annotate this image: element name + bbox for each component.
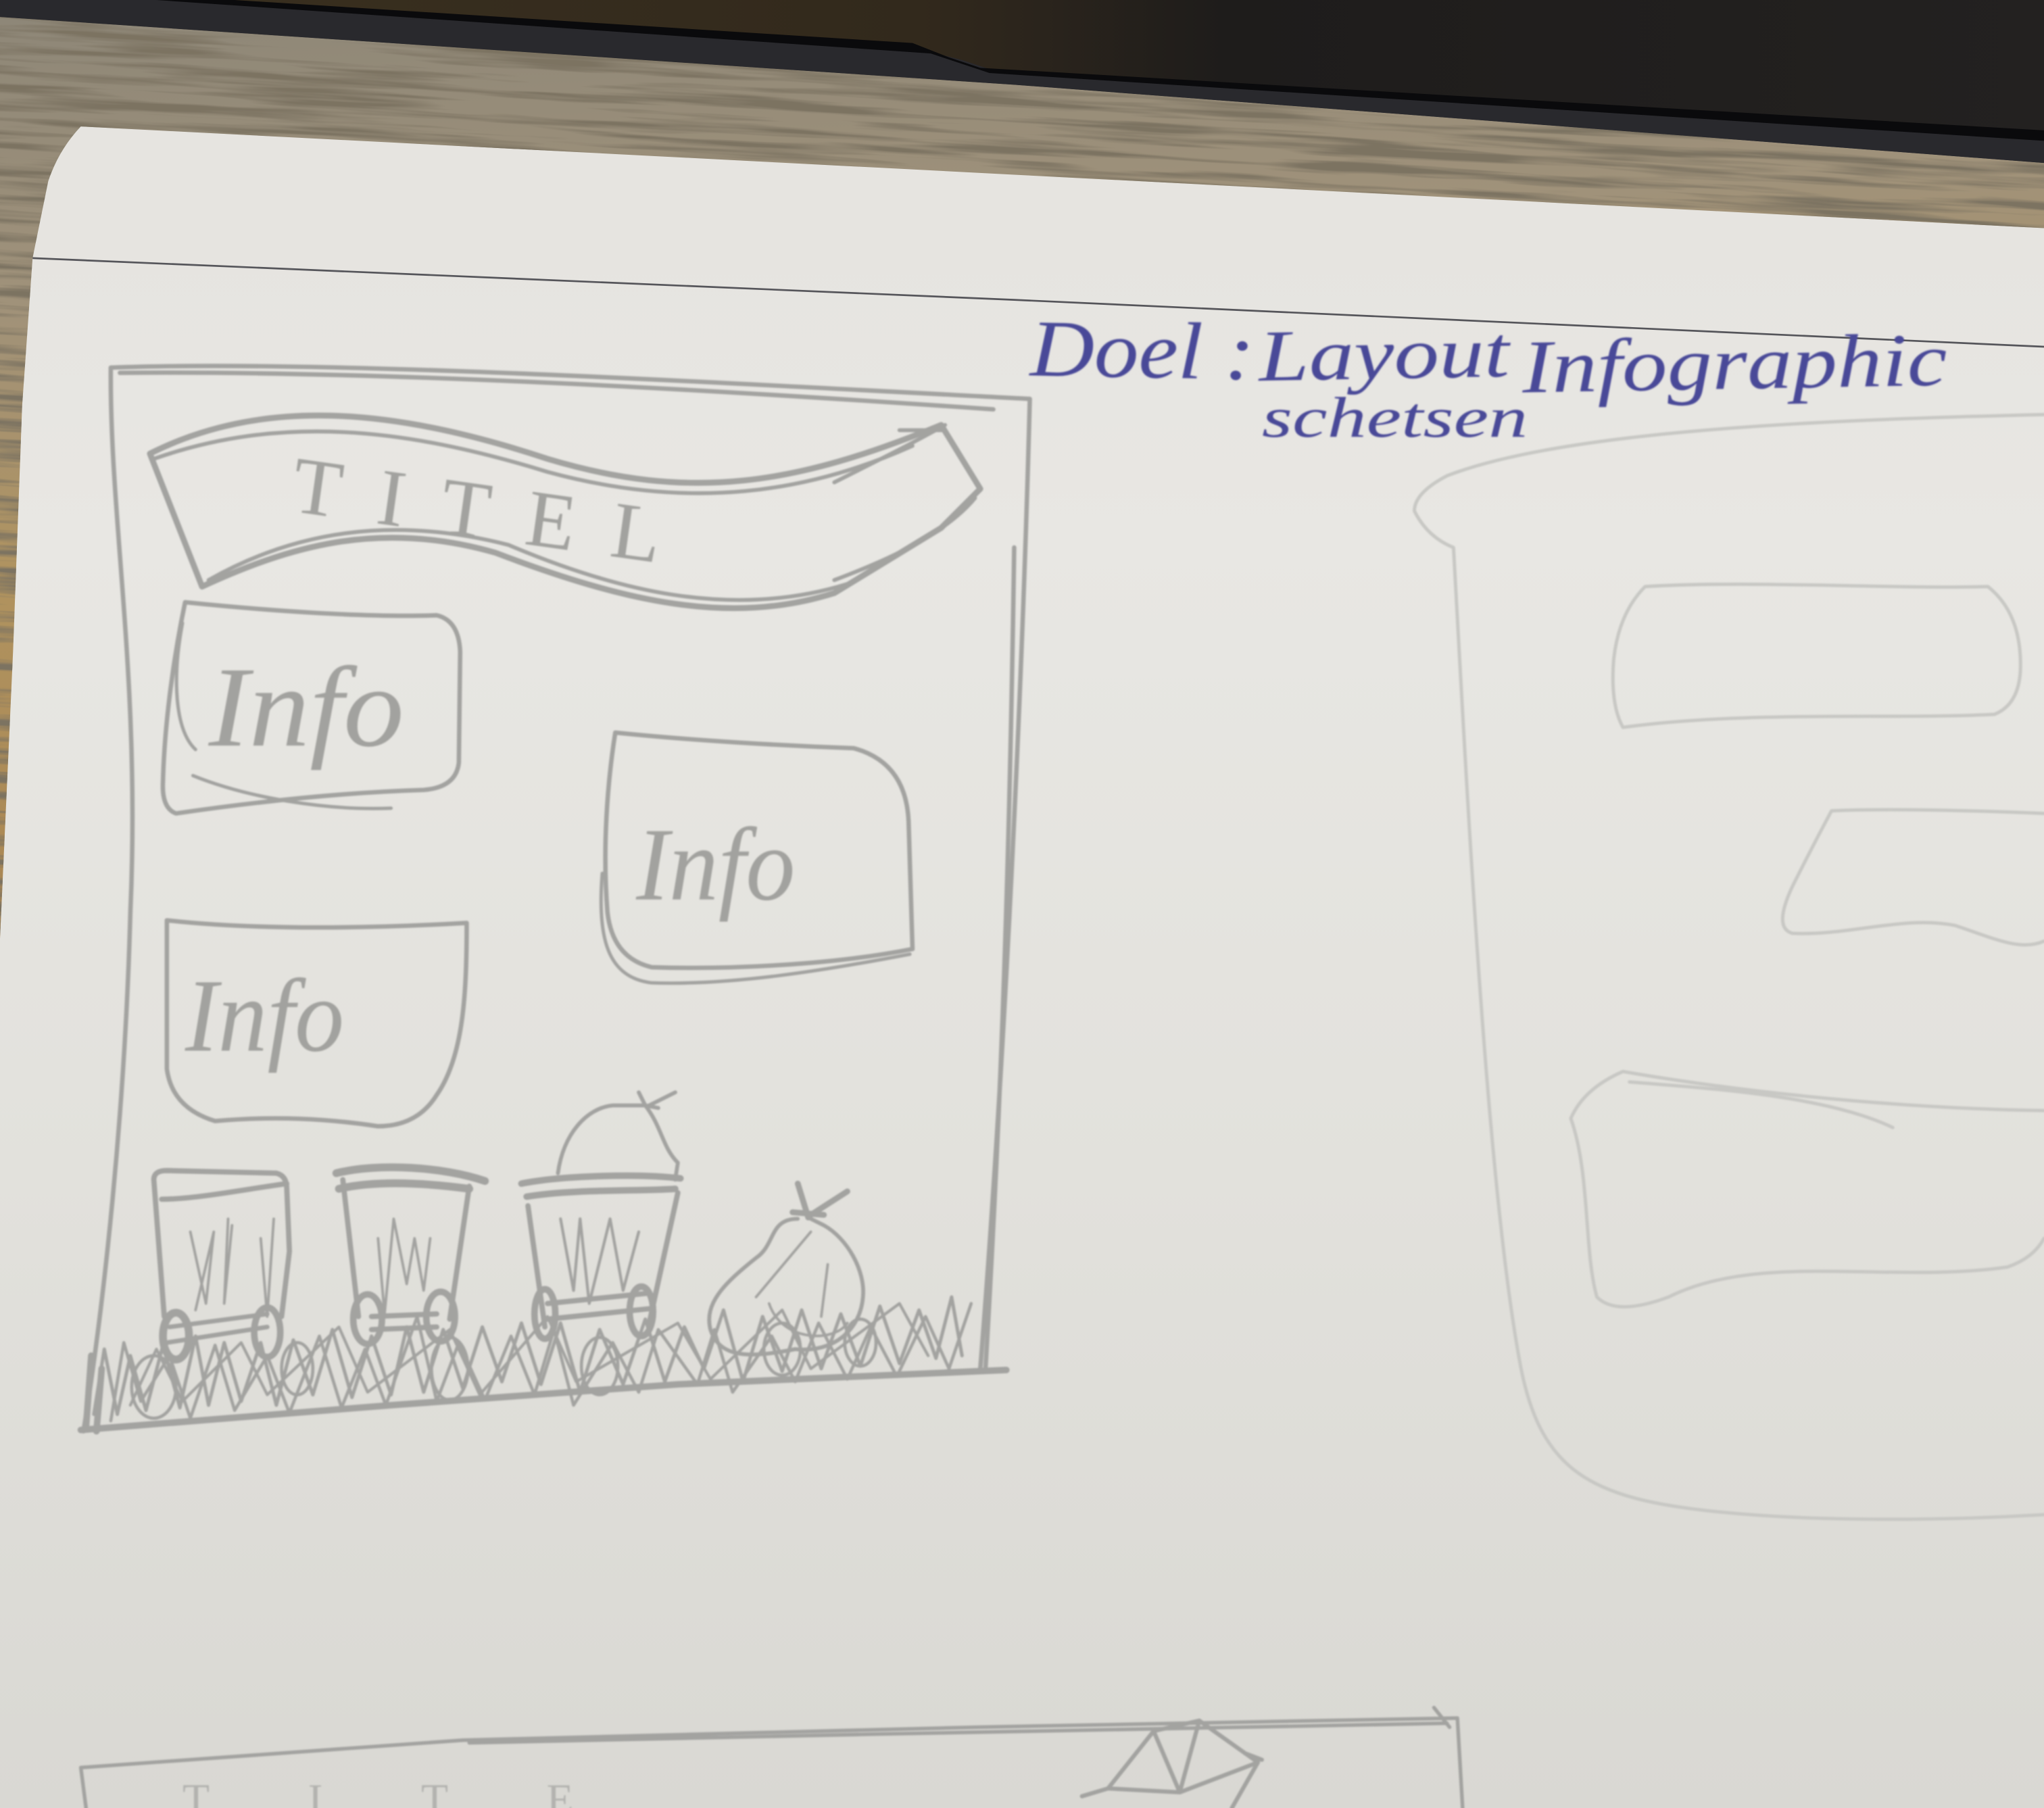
panel: layout sketch bbox=[81, 366, 1030, 1432]
crumpled paper icon bbox=[1082, 1721, 1262, 1808]
paper fold line bbox=[32, 258, 2044, 347]
faint box 2 bbox=[1782, 810, 2044, 945]
grass scribble bbox=[81, 1297, 1006, 1432]
handwritten goal note: Infographic bbox=[1521, 318, 1948, 410]
laptop edge at top bbox=[0, 0, 2044, 163]
handwritten goal note: Doel : bbox=[1028, 303, 1255, 397]
info box 2: Info bbox=[635, 808, 795, 923]
banner: title bbox=[150, 416, 980, 608]
icon: garbage bag bbox=[709, 1183, 863, 1354]
outer frame bbox=[83, 366, 1030, 1432]
info box 3 bbox=[167, 921, 466, 1126]
faint beaker sketch bbox=[1414, 414, 2044, 1519]
ground line bbox=[81, 1370, 1006, 1430]
info box 1: Info bbox=[208, 643, 404, 771]
info box 1 bbox=[163, 602, 460, 813]
wooden desk bbox=[0, 17, 2044, 938]
handwritten goal note: schetsen bbox=[1262, 386, 1528, 449]
icon: bin 2 bbox=[337, 1167, 485, 1344]
title text: TITEL bbox=[287, 439, 667, 580]
handwritten goal note bbox=[1028, 303, 1948, 449]
faint box 3 bbox=[1571, 1071, 2044, 1306]
icon: bin 1 bbox=[154, 1171, 289, 1360]
info box 3: Info bbox=[185, 958, 344, 1073]
second sketch at page bottom bbox=[81, 1707, 1463, 1808]
faint box 1 bbox=[1613, 584, 2020, 727]
handwritten goal note: Layout bbox=[1257, 312, 1512, 397]
info box 2 bbox=[601, 733, 912, 983]
icon: bin 3 with bag bbox=[521, 1092, 681, 1339]
